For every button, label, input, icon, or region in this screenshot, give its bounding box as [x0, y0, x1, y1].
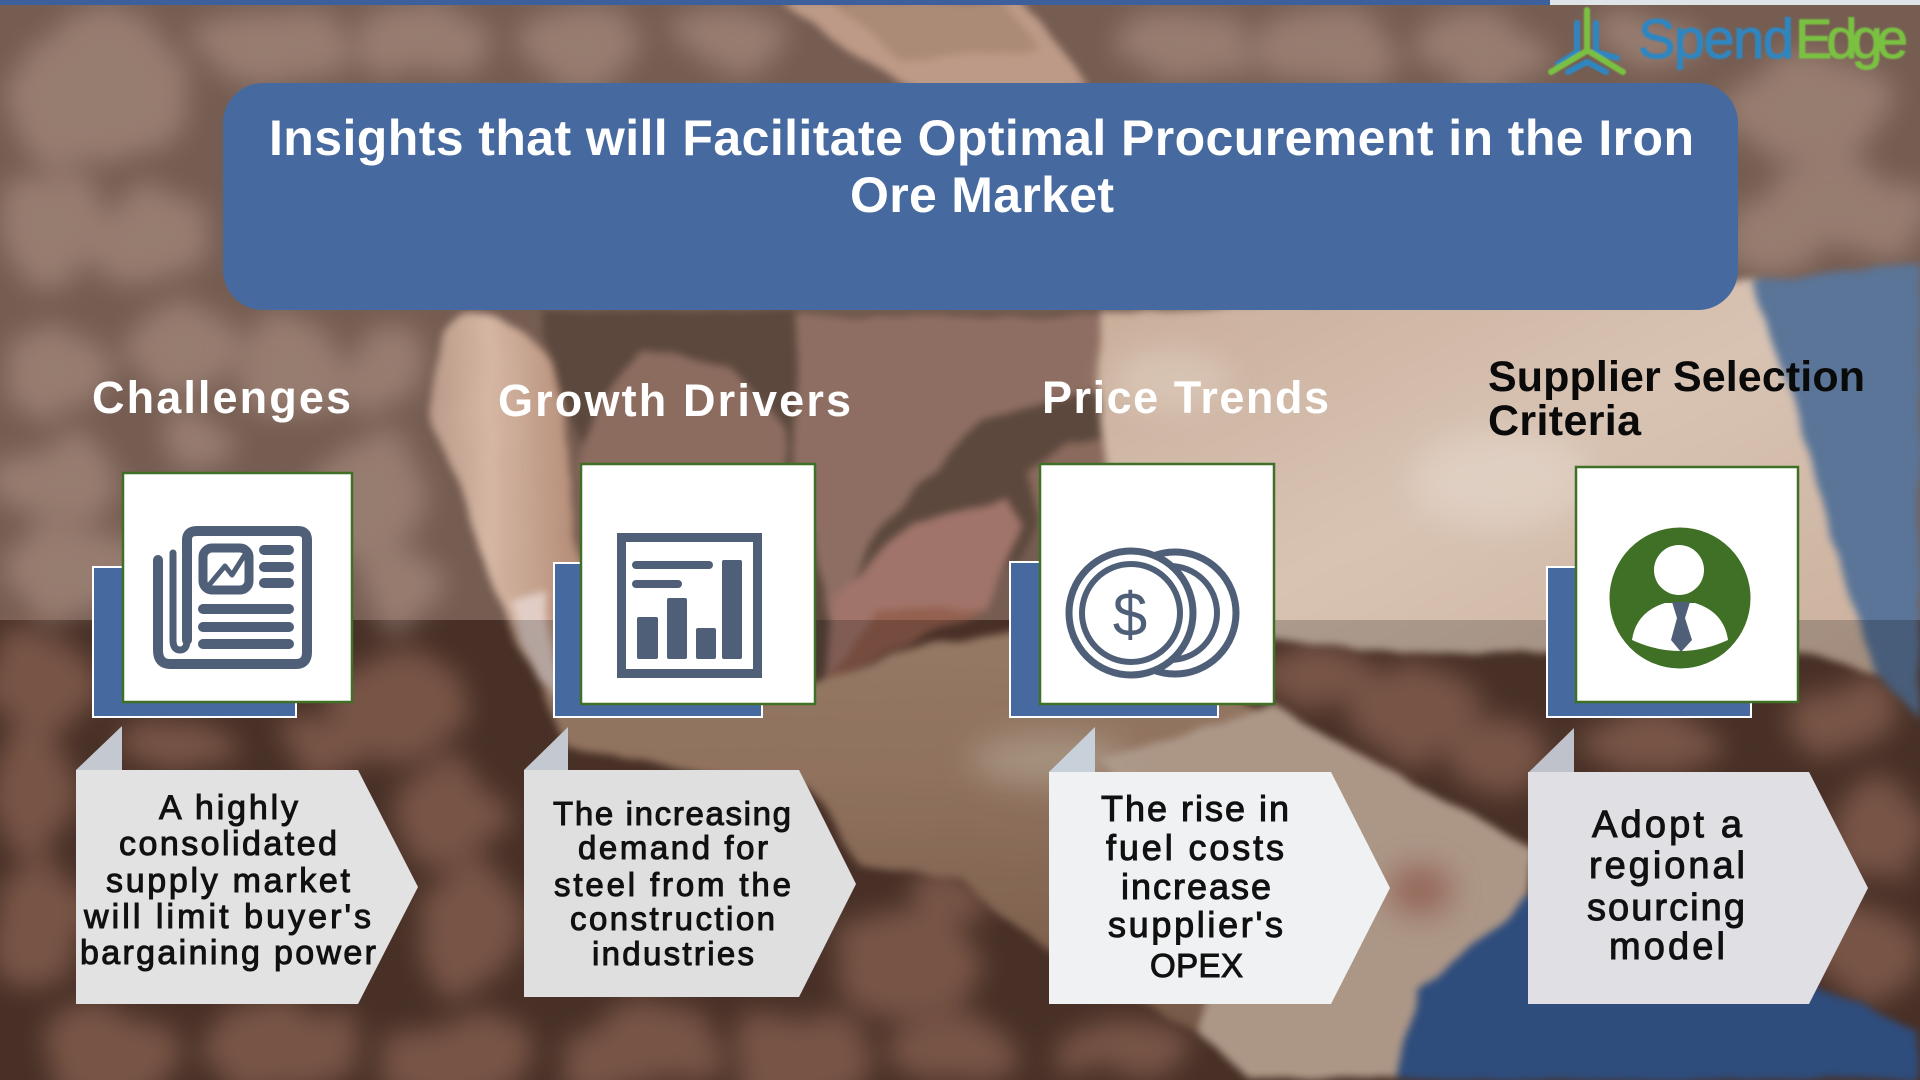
callout: challenges	[76, 726, 418, 1004]
icon card: person	[1547, 467, 1798, 717]
heading: growth drivers: Growth Drivers	[498, 375, 851, 426]
panel: supplier selection criteria	[1488, 353, 1877, 1004]
callout: growth drivers	[524, 727, 856, 997]
heading: challenges: Challenges	[92, 372, 351, 423]
icon: coins: $	[1113, 581, 1147, 650]
heading: price trends: Price Trends	[1042, 372, 1329, 423]
panel: challenges	[76, 372, 418, 1004]
panel: growth drivers	[498, 375, 856, 997]
left fingers and palm	[431, 312, 1530, 1080]
title text: Insights that will Facilitate Optimal Procurement in the Iron	[269, 110, 1694, 166]
callout: supplier selection criteria: sourcing	[1587, 887, 1745, 929]
callout: growth drivers: The increasing	[553, 795, 791, 832]
callout: price trends	[1049, 727, 1390, 1004]
callout: growth drivers: industries	[592, 935, 754, 972]
logo wordmark: Spend	[1638, 7, 1794, 70]
title banner	[223, 83, 1738, 310]
callout: supplier selection criteria	[1528, 728, 1868, 1004]
callout: supplier selection criteria: regional	[1589, 845, 1745, 887]
skin tones and wrist detail	[970, 350, 1590, 914]
ore rocks in hand	[540, 312, 1170, 690]
icon: bar chart report	[622, 538, 758, 674]
icon: newspaper	[158, 531, 307, 664]
callout: supplier selection criteria: model	[1609, 926, 1725, 968]
icon card: bar report	[554, 464, 815, 717]
logo mark	[1551, 10, 1623, 72]
thumb at top	[778, 0, 1090, 110]
lower rocks	[0, 620, 1920, 1080]
callout: supplier selection criteria: Adopt a	[1592, 804, 1743, 846]
SpendEdge logo	[1551, 7, 1908, 72]
right hand	[1100, 280, 1880, 675]
callout: growth drivers: construction	[570, 900, 775, 937]
icon: business person	[1610, 528, 1750, 668]
sleeves	[1751, 262, 1920, 721]
callout: challenges: will limit buyer's	[83, 898, 371, 936]
icon card: coins	[1010, 464, 1274, 717]
logo wordmark: Edge	[1795, 7, 1908, 70]
heading: supplier selection criteria: Criteria	[1488, 397, 1642, 445]
icon: coins	[1069, 551, 1236, 675]
callout: price trends: OPEX	[1150, 947, 1243, 984]
callout: challenges: A highly	[159, 789, 298, 827]
heading: supplier selection criteria: Supplier Selection	[1488, 353, 1865, 401]
callout: price trends: fuel costs	[1106, 827, 1284, 868]
callout: price trends: increase	[1121, 866, 1271, 907]
callout: challenges: supply market	[106, 862, 351, 900]
callout: price trends: The rise in	[1101, 788, 1289, 829]
top edge strip	[0, 0, 1920, 5]
upper rocks	[0, 7, 1920, 625]
callout: challenges: bargaining power	[80, 934, 376, 972]
panel: price trends	[1010, 372, 1390, 1004]
callout: challenges: consolidated	[119, 825, 337, 863]
callout: growth drivers: demand for	[578, 829, 768, 866]
icon card: newspaper	[93, 473, 352, 717]
callout: price trends: supplier's	[1108, 904, 1283, 945]
callout: growth drivers: steel from the	[554, 866, 791, 903]
title text: Ore Market	[850, 167, 1114, 223]
